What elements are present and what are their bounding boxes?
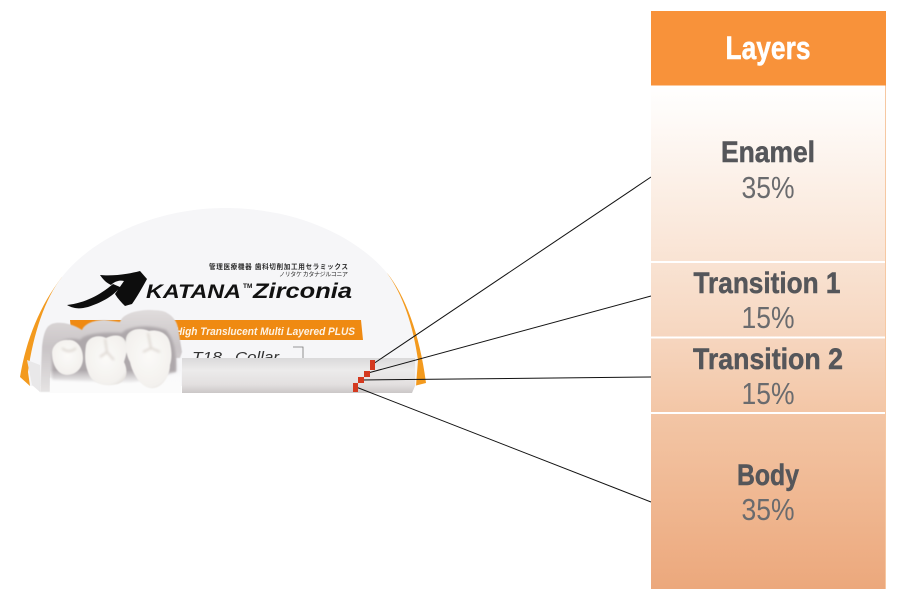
- row: transition 2: [693, 343, 843, 411]
- logo mark: [67, 271, 147, 308]
- header: Layers: [726, 30, 810, 66]
- left disc block: [27, 360, 40, 392]
- teeth: [52, 329, 172, 388]
- row: body: [737, 459, 799, 527]
- shade label: Collar: [235, 349, 280, 366]
- band text: High Translucent Multi Layered PLUS: [175, 326, 356, 338]
- disc cut edge: [182, 358, 415, 393]
- row: transition 1: Transition 1: [694, 267, 840, 300]
- row: transition 2: Transition 2: [693, 343, 843, 376]
- panel: layers table: [651, 11, 886, 589]
- disc orange band: [70, 320, 363, 340]
- panel background: [651, 85, 886, 589]
- disc orange rim: [20, 273, 426, 386]
- row: body: 35%: [742, 492, 794, 527]
- tooth shading: [62, 333, 160, 360]
- japanese label: [209, 262, 348, 278]
- row: enamel: [721, 136, 815, 205]
- row: enamel: Enamel: [721, 136, 815, 169]
- red layer markers: [353, 360, 375, 392]
- row: transition 2: 15%: [742, 376, 794, 411]
- product: zirconia disc with teeth: [20, 208, 426, 393]
- japanese label: ノリタケ カタナジルコニア: [279, 270, 348, 278]
- header: [651, 11, 886, 86]
- row: body: Body: [737, 459, 799, 492]
- disc white face: [28, 208, 418, 386]
- shade label: [192, 347, 303, 366]
- shade label: T18: [192, 349, 223, 366]
- row: transition 1: 15%: [742, 300, 794, 335]
- logo wordmark: KATANA: [146, 282, 241, 303]
- japanese label: 管理医療機器 歯科切削加工用セラミックス: [209, 262, 348, 271]
- leader lines: [356, 177, 651, 502]
- teeth crown shell: [40, 310, 182, 393]
- logo wordmark: TM: [243, 283, 252, 290]
- row: enamel: 35%: [742, 170, 794, 205]
- row: transition 1: [694, 267, 840, 335]
- logo wordmark: [146, 280, 352, 303]
- logo wordmark: Zirconia: [252, 280, 352, 303]
